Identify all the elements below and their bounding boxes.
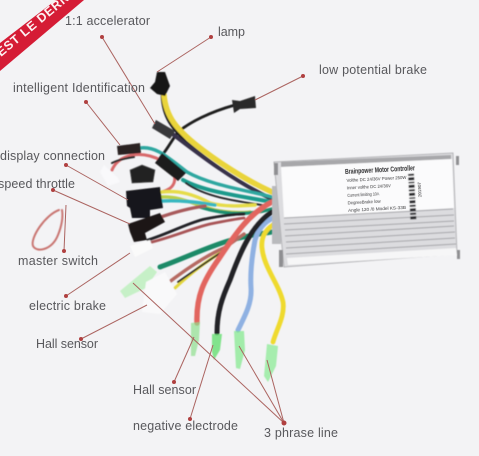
label: speed throttle: speed throttle — [0, 177, 75, 191]
wire: dark lower — [186, 183, 268, 206]
leader: 1:1 accelerator — [100, 35, 155, 124]
wire: yellow lamp — [164, 95, 272, 192]
label: 3 phrase line: 3 phrase line — [264, 426, 338, 440]
wire: black lower short — [178, 248, 228, 282]
label specs: Current limiting 10A — [347, 191, 380, 198]
connector: speed throttle block — [128, 213, 165, 242]
wire: yellow lower — [175, 252, 222, 288]
wire: phase red — [197, 202, 272, 323]
wire: black and purple accelerator — [170, 132, 272, 199]
label heading: Brainpower Motor Controller — [345, 165, 415, 176]
label specs: Volthe DC 24/36V Power 250W — [346, 175, 407, 183]
wire: phase black — [217, 212, 272, 333]
label: intelligent identification: intelligent Identification — [13, 81, 145, 95]
wire: dark red from block — [158, 206, 205, 218]
wire: green bundle — [200, 207, 272, 213]
connector: lamp — [150, 72, 170, 96]
wire: red lower block — [148, 218, 244, 243]
label serial number: 201907 — [417, 182, 422, 197]
leader: master switch — [62, 205, 66, 253]
wire: dark green — [160, 232, 272, 267]
label: display connection: display connection — [0, 149, 105, 163]
label specs: Angle 120 /0 Model KS-33B — [348, 205, 406, 213]
label specs: Inner volthe DC 24/36V — [347, 183, 391, 190]
leader: 3 phrase line — [133, 283, 286, 426]
connector: electric brake white — [130, 240, 153, 257]
wire: phase yellow — [262, 225, 283, 342]
controller box — [272, 153, 460, 267]
wire: pink loop — [112, 155, 175, 192]
wiring harness — [33, 72, 283, 382]
label specs — [346, 175, 408, 213]
label: low potential brake: low potential brake — [319, 63, 427, 77]
label: hall sensor left: Hall sensor — [36, 337, 98, 351]
leader: negative electrode — [188, 345, 213, 421]
controller bottom rail — [287, 248, 457, 265]
connector: 1:1 accelerator — [152, 120, 175, 139]
ribbon band — [0, 0, 84, 71]
terminal: black phase — [212, 334, 222, 360]
controller top rail — [281, 155, 451, 167]
label: 1:1 accelerator: 1:1 accelerator — [65, 14, 150, 28]
wire: black lower block — [148, 214, 244, 240]
wire: yellow from block — [162, 192, 255, 206]
wire: teal from block — [162, 201, 215, 205]
terminal: blue phase — [234, 331, 245, 369]
controller barcode — [408, 174, 416, 219]
terminal: red phase — [191, 322, 200, 356]
wire: black beside lamp wire — [162, 96, 272, 200]
leader: lamp — [157, 35, 213, 72]
controller label — [281, 159, 454, 218]
controller label text — [345, 165, 423, 213]
label specs: DegreeBrake low — [348, 199, 382, 205]
leader: hall sensor bottom — [172, 337, 194, 384]
controller mounting tabs — [274, 156, 460, 267]
leader: speed throttle — [51, 188, 130, 224]
terminal: yellow phase — [264, 344, 278, 382]
controller fins — [284, 209, 456, 254]
wire: brown red lower — [168, 234, 244, 283]
leader: intelligent identification — [84, 100, 120, 145]
wire: upper teal — [140, 148, 272, 197]
wire: teal second — [183, 180, 272, 202]
corner ribbon — [0, 0, 84, 71]
leader: electric brake — [64, 253, 130, 298]
connector: white grip left — [100, 165, 120, 186]
connector: hall sensor white — [142, 272, 177, 314]
label: negative electrode: negative electrode — [133, 419, 238, 433]
connector: centre black plug — [130, 165, 155, 183]
callout leader lines — [51, 35, 305, 426]
label: electric brake: electric brake — [29, 299, 106, 313]
leader: display connection — [64, 163, 128, 200]
controller connector collar — [272, 186, 281, 244]
label: hall sensor bottom: Hall sensor — [133, 383, 196, 397]
wire: master switch loop — [33, 210, 62, 250]
leader: hall sensor left — [79, 305, 147, 341]
wire: black stub left — [112, 157, 134, 163]
connector: low potential brake — [232, 96, 256, 113]
wire: black low potential brake — [163, 105, 235, 154]
controller body — [274, 153, 457, 267]
wire: yellow green from block — [162, 197, 250, 213]
label: master switch: master switch — [18, 254, 98, 268]
connector: display block — [126, 187, 163, 218]
connector: diagonal sleeve — [155, 153, 186, 181]
wire: phase blue — [238, 218, 273, 330]
label: lamp: lamp — [218, 25, 245, 39]
leader: low potential brake — [255, 74, 305, 100]
connector: intelligent identification — [117, 143, 141, 155]
connector: green terminal cluster — [120, 266, 157, 298]
